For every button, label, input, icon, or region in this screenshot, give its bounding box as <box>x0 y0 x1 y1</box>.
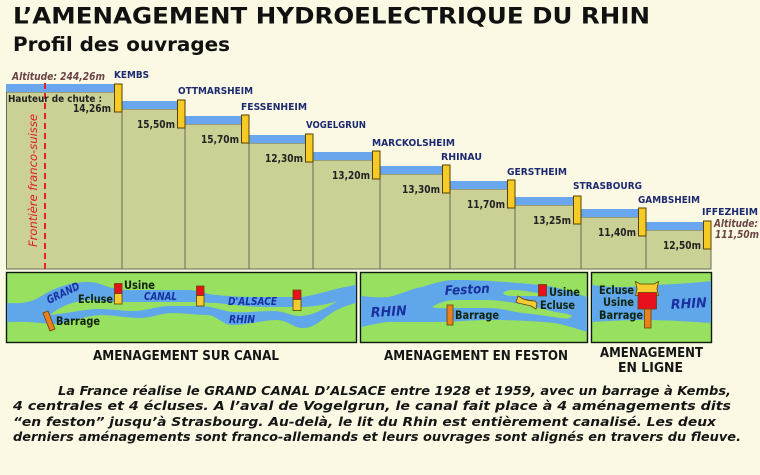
river <box>361 280 587 332</box>
head values: 13,30m <box>402 184 440 196</box>
labels: D'ALSACE <box>228 295 277 308</box>
labels: CANAL <box>144 290 177 303</box>
station names: OTTMARSHEIM <box>178 86 253 97</box>
paragraph <box>12 383 741 444</box>
station names: MARCKOLSHEIM <box>372 138 455 149</box>
labels <box>599 283 708 322</box>
paragraph: derniers aménagements sont franco-allemands et leurs ouvrages sont alignés en travers du fleuve. <box>13 429 741 444</box>
river and canal <box>7 282 356 328</box>
head values: 11,40m <box>598 227 636 239</box>
altitude bottom <box>713 218 759 241</box>
station names: VOGELGRUN <box>306 120 366 131</box>
panel: festoon scheme <box>360 272 588 342</box>
labels: RHIN <box>370 303 408 321</box>
upper island <box>503 290 539 296</box>
icon: ecluse <box>636 282 658 296</box>
icon: barrage <box>447 305 453 325</box>
icon: usine <box>638 292 656 309</box>
paragraph: 4 centrales et 4 écluses. A l’aval de Vogelgrun, le canal fait place à 4 aménagements dits <box>12 398 731 413</box>
caption: canal: AMENAGEMENT SUR CANAL <box>93 349 279 364</box>
caption: festoon: AMENAGEMENT EN FESTON <box>384 349 568 364</box>
station names: KEMBS <box>114 70 149 81</box>
power plants and locks <box>114 284 301 310</box>
labels: Ecluse <box>78 292 113 306</box>
title: L’AMENAGEMENT HYDROELECTRIQUE DU RHIN <box>13 4 650 30</box>
head values: 15,70m <box>201 134 239 146</box>
dam gates <box>114 84 711 249</box>
station names <box>114 70 758 218</box>
head values: 13,25m <box>533 215 571 227</box>
paragraph: “en feston” jusqu’à Strasbourg. Au-delà, le lit du Rhin est entièrement canalisé. Les deux <box>13 414 717 429</box>
panel: in-line scheme <box>592 272 712 342</box>
labels: Barrage <box>599 308 643 322</box>
head values <box>73 103 701 252</box>
water levels <box>6 84 703 230</box>
lower island <box>432 300 572 319</box>
paragraph: La France réalise le GRAND CANAL D’ALSACE entre 1928 et 1959, avec un barrage à Kembs, <box>58 383 731 398</box>
head values: 15,50m <box>137 119 175 131</box>
head label: Hauteur de chute : <box>8 94 102 105</box>
labels <box>370 282 580 322</box>
altitude top: Altitude: 244,26m <box>11 71 105 83</box>
labels: RHIN <box>670 295 708 313</box>
subtitle: Profil des ouvrages <box>13 33 230 56</box>
station names: GAMBSHEIM <box>638 195 700 206</box>
labels <box>45 278 277 328</box>
station names: RHINAU <box>441 152 482 163</box>
caption: in-line: AMENAGEMENT <box>600 346 703 361</box>
border label: Frontière franco-suisse <box>26 114 40 247</box>
labels: Usine <box>603 295 634 309</box>
labels: RHIN <box>229 313 255 326</box>
labels: Barrage <box>455 308 499 322</box>
icon: usine <box>538 284 546 296</box>
labels: Usine <box>549 285 580 299</box>
labels: GRAND <box>45 280 82 307</box>
chart: profile of the works <box>6 70 759 269</box>
panel: canal scheme <box>6 272 356 342</box>
island <box>50 300 338 316</box>
river <box>592 281 711 323</box>
head values: 14,26m <box>73 103 111 115</box>
station names: GERSTHEIM <box>507 167 567 178</box>
labels: Ecluse <box>599 283 634 297</box>
head values: 11,70m <box>467 199 505 211</box>
border line <box>44 83 46 269</box>
icon: barrage <box>43 311 55 331</box>
labels: Feston <box>444 282 490 299</box>
head values: 12,50m <box>663 240 701 252</box>
caption: in-line: EN LIGNE <box>618 361 683 376</box>
caption: in-line <box>600 346 703 376</box>
station names: STRASBOURG <box>573 181 642 192</box>
icon: barrage <box>644 307 651 328</box>
icon: ecluse <box>516 296 537 309</box>
head values: 12,30m <box>265 153 303 165</box>
labels: Usine <box>124 278 155 292</box>
head values: 13,20m <box>332 170 370 182</box>
labels: Ecluse <box>540 298 575 312</box>
labels: Barrage <box>56 314 100 328</box>
ground blocks <box>6 92 711 269</box>
station names: FESSENHEIM <box>241 102 307 113</box>
